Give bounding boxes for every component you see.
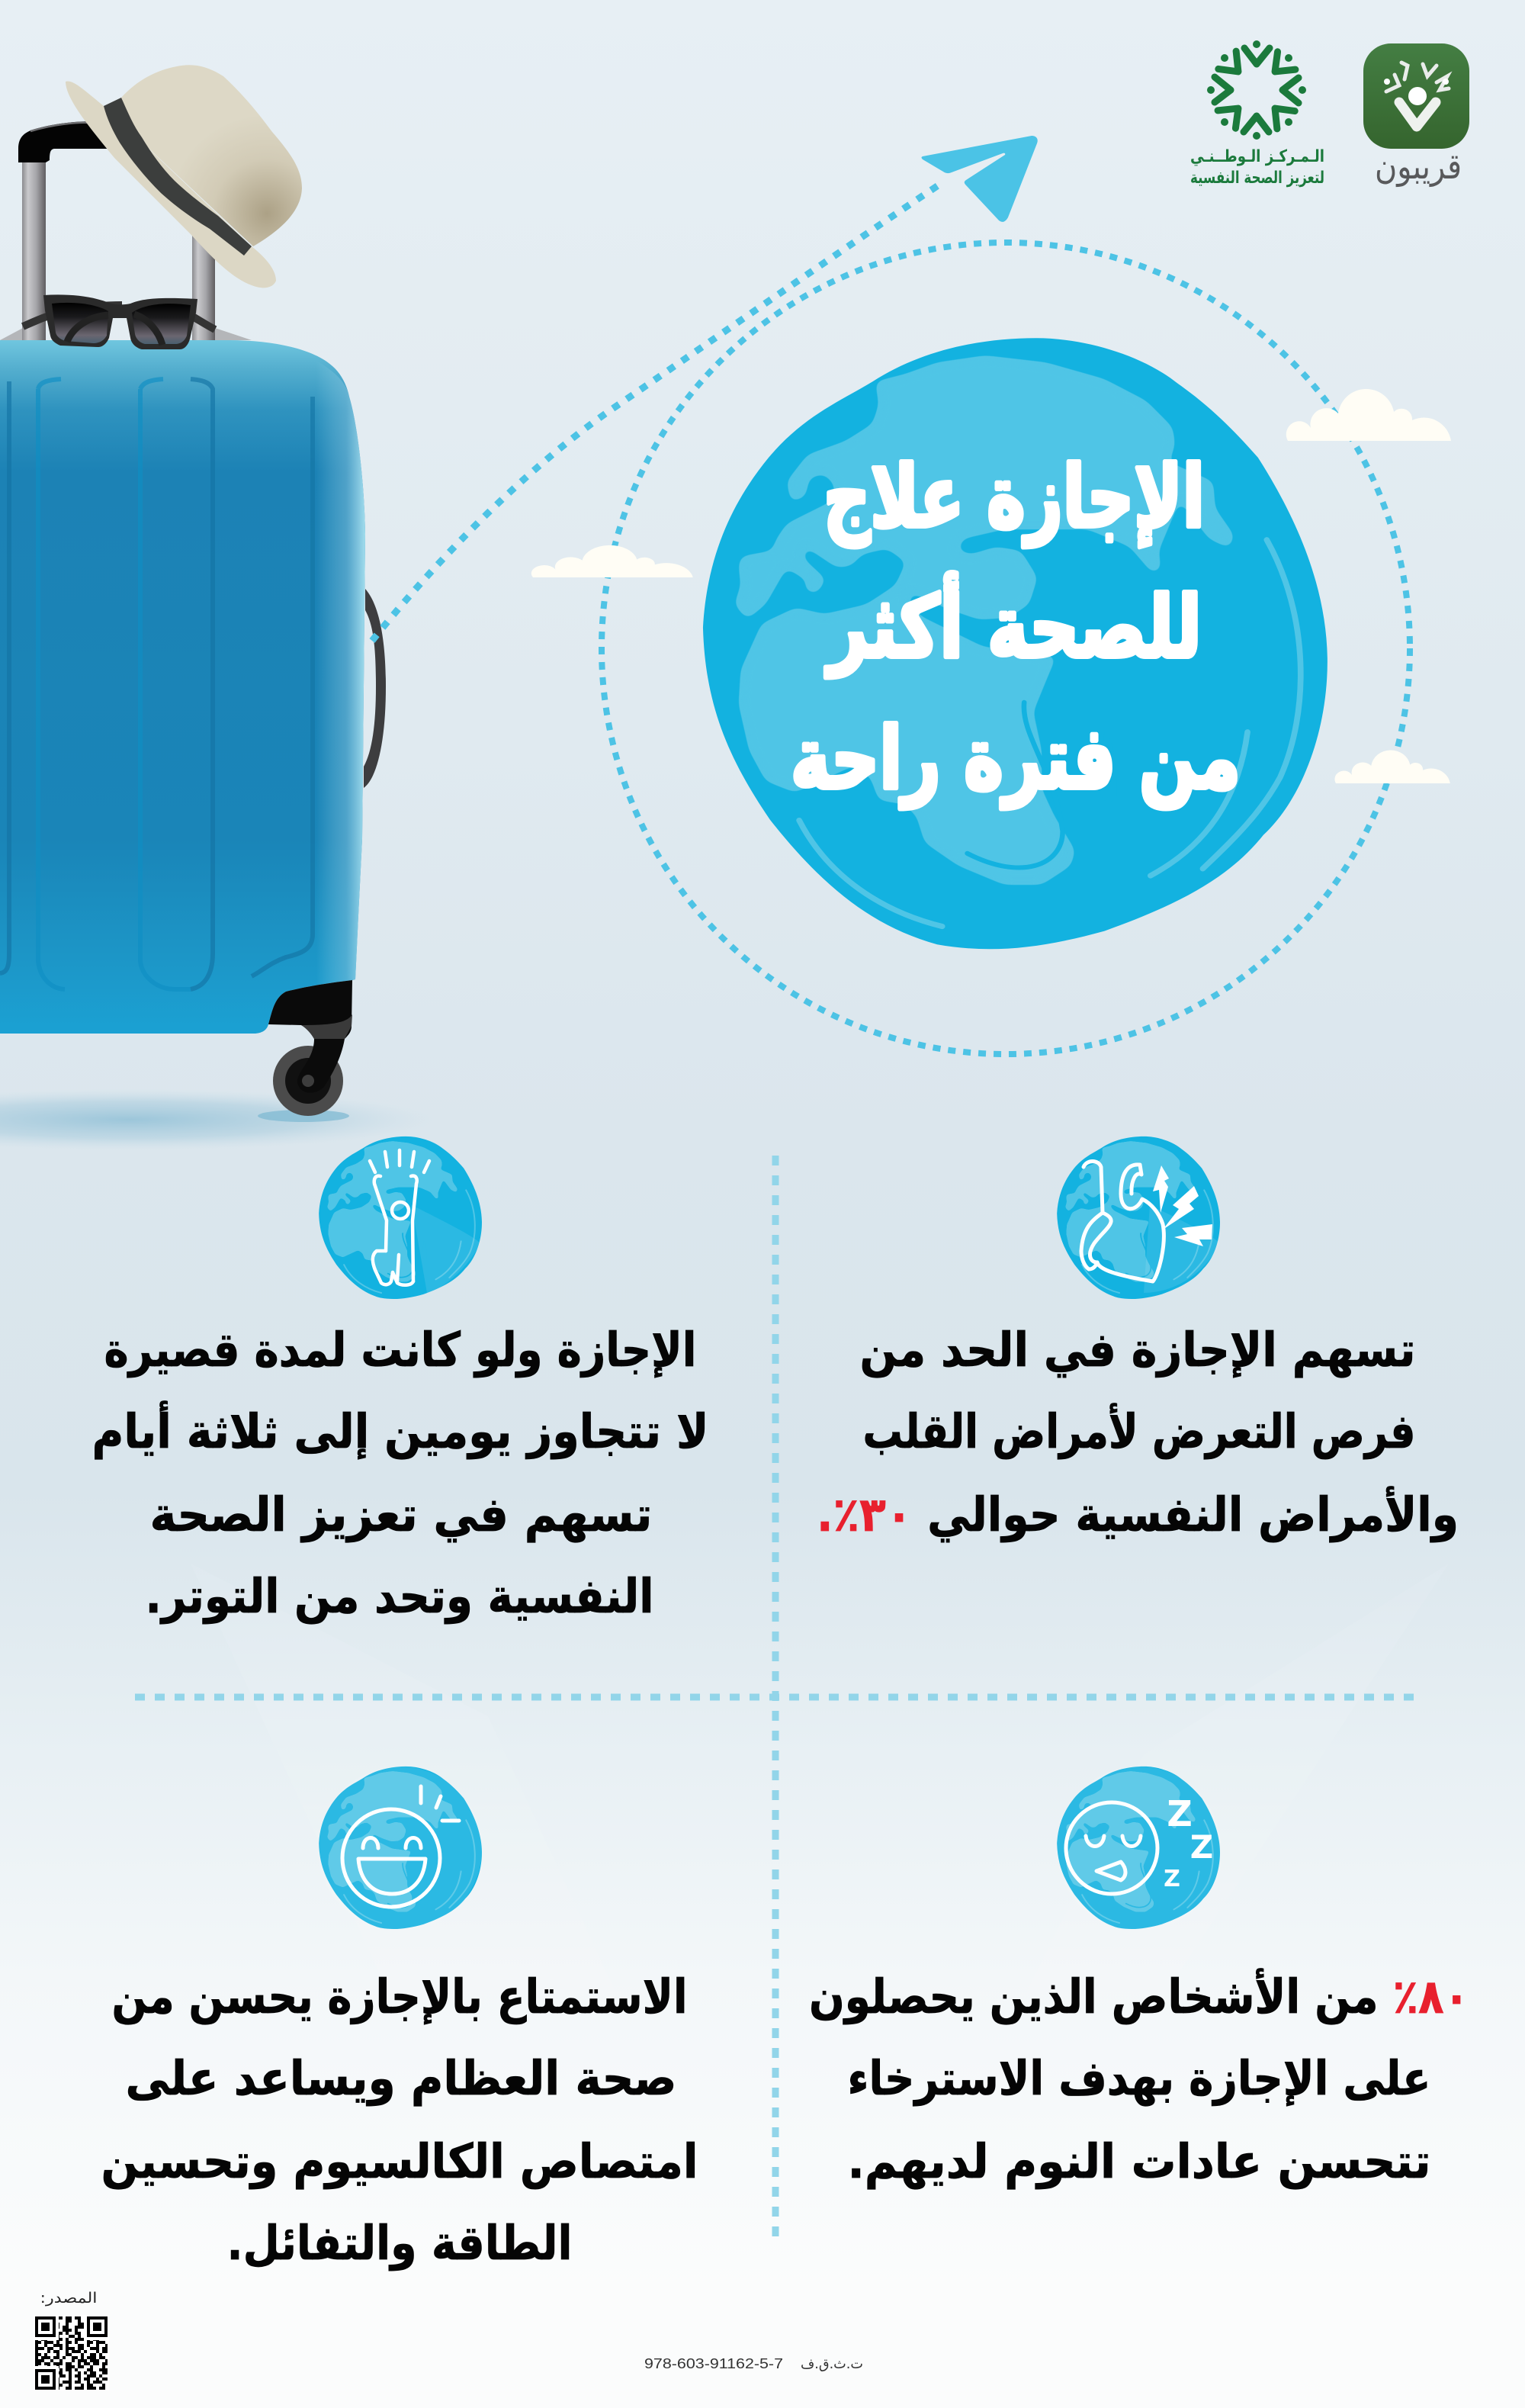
text block: short vacation: الإجازة ولو كانت لمدة قصيرة xyxy=(104,1322,697,1378)
suitcase shadow xyxy=(0,1089,435,1150)
logo: national center xyxy=(1190,40,1324,188)
suitcase grooves xyxy=(0,379,313,989)
text block: heart and mental illness: تسهم الإجازة في الحد من xyxy=(860,1322,1415,1378)
suitcase caster wheel xyxy=(258,980,352,1122)
icon: cheering person xyxy=(319,1136,482,1299)
icon: sleeping face: Z xyxy=(1190,1828,1213,1866)
ISBN xyxy=(644,2356,863,2372)
logo text: national center xyxy=(1190,147,1324,188)
title: من فترة راحة xyxy=(791,709,1241,809)
text block: bones and calcium: الطاقة والتفائل. xyxy=(227,2215,572,2271)
dotted plane trail xyxy=(372,185,939,641)
title: الإجازة علاج xyxy=(824,448,1205,548)
text block: bones and calcium: الاستمتاع بالإجازة يحسن من xyxy=(111,1969,688,2024)
text block: short vacation: تسهم في تعزيز الصحة xyxy=(149,1487,653,1542)
sunglasses xyxy=(23,294,215,349)
icon: laughing face xyxy=(318,1767,482,1931)
cloud right xyxy=(1286,389,1451,441)
globe xyxy=(703,338,1328,949)
title: للصحة أكثر xyxy=(825,572,1202,677)
QR code xyxy=(34,2315,109,2390)
suitcase trolley handle xyxy=(0,121,252,340)
icon: sleeping face: Z xyxy=(1167,1793,1193,1834)
logo: Qareboon app xyxy=(1363,43,1469,188)
hat xyxy=(66,65,302,288)
source label: المصدر: xyxy=(40,2290,98,2307)
text block: sleep habits: على الإجازة بهدف الاسترخاء xyxy=(848,2050,1430,2106)
text block: heart and mental illness xyxy=(817,1322,1459,1543)
text block: sleep habits: تتحسن عادات النوم لديهم. xyxy=(848,2133,1430,2190)
text block: sleep habits: ٨٠٪ من الأشخاص الذين يحصلون xyxy=(809,1968,1469,2025)
ISBN: 978-603-91162-5-7 xyxy=(644,2356,783,2371)
logo text: Qareboon: قريبون xyxy=(1375,146,1462,188)
text block: bones and calcium: صحة العظام ويساعد على xyxy=(125,2050,677,2107)
text block: heart and mental illness: والأمراض النفسية حوالي ٣٠٪. xyxy=(817,1486,1459,1543)
icon: paper plane xyxy=(921,136,1038,222)
suitcase body xyxy=(0,340,365,1034)
icon: sleeping face: Z xyxy=(1164,1866,1180,1892)
cloud lower right xyxy=(1334,750,1450,783)
text block: heart and mental illness: فرص التعرض لأمراض القلب xyxy=(863,1403,1415,1460)
text block: short vacation xyxy=(92,1322,709,1624)
dotted orbit ring xyxy=(602,243,1410,1054)
suitcase side handle xyxy=(364,589,386,788)
icon: heart with lightning xyxy=(1057,1136,1220,1299)
icon: sleeping face xyxy=(1057,1767,1221,1931)
text block: short vacation: النفسية وتحد من التوتر. xyxy=(145,1568,654,1624)
text block: sleep habits xyxy=(809,1968,1469,2190)
title xyxy=(791,448,1241,809)
text block: bones and calcium: امتصاص الكالسيوم وتحسين xyxy=(101,2133,698,2190)
cloud left xyxy=(531,545,693,577)
ISBN: ت.ث.ق.ف xyxy=(801,2356,863,2372)
logo text: national center: لتعزيز الصحة النفسية xyxy=(1190,169,1324,188)
text block: short vacation: لا تتجاوز يومين إلى ثلاثة أيام xyxy=(92,1400,709,1460)
dividers xyxy=(135,1156,1414,2239)
text block: bones and calcium xyxy=(101,1969,698,2271)
logo text: national center: الـمـركـز الـوطــنـي xyxy=(1190,147,1324,166)
